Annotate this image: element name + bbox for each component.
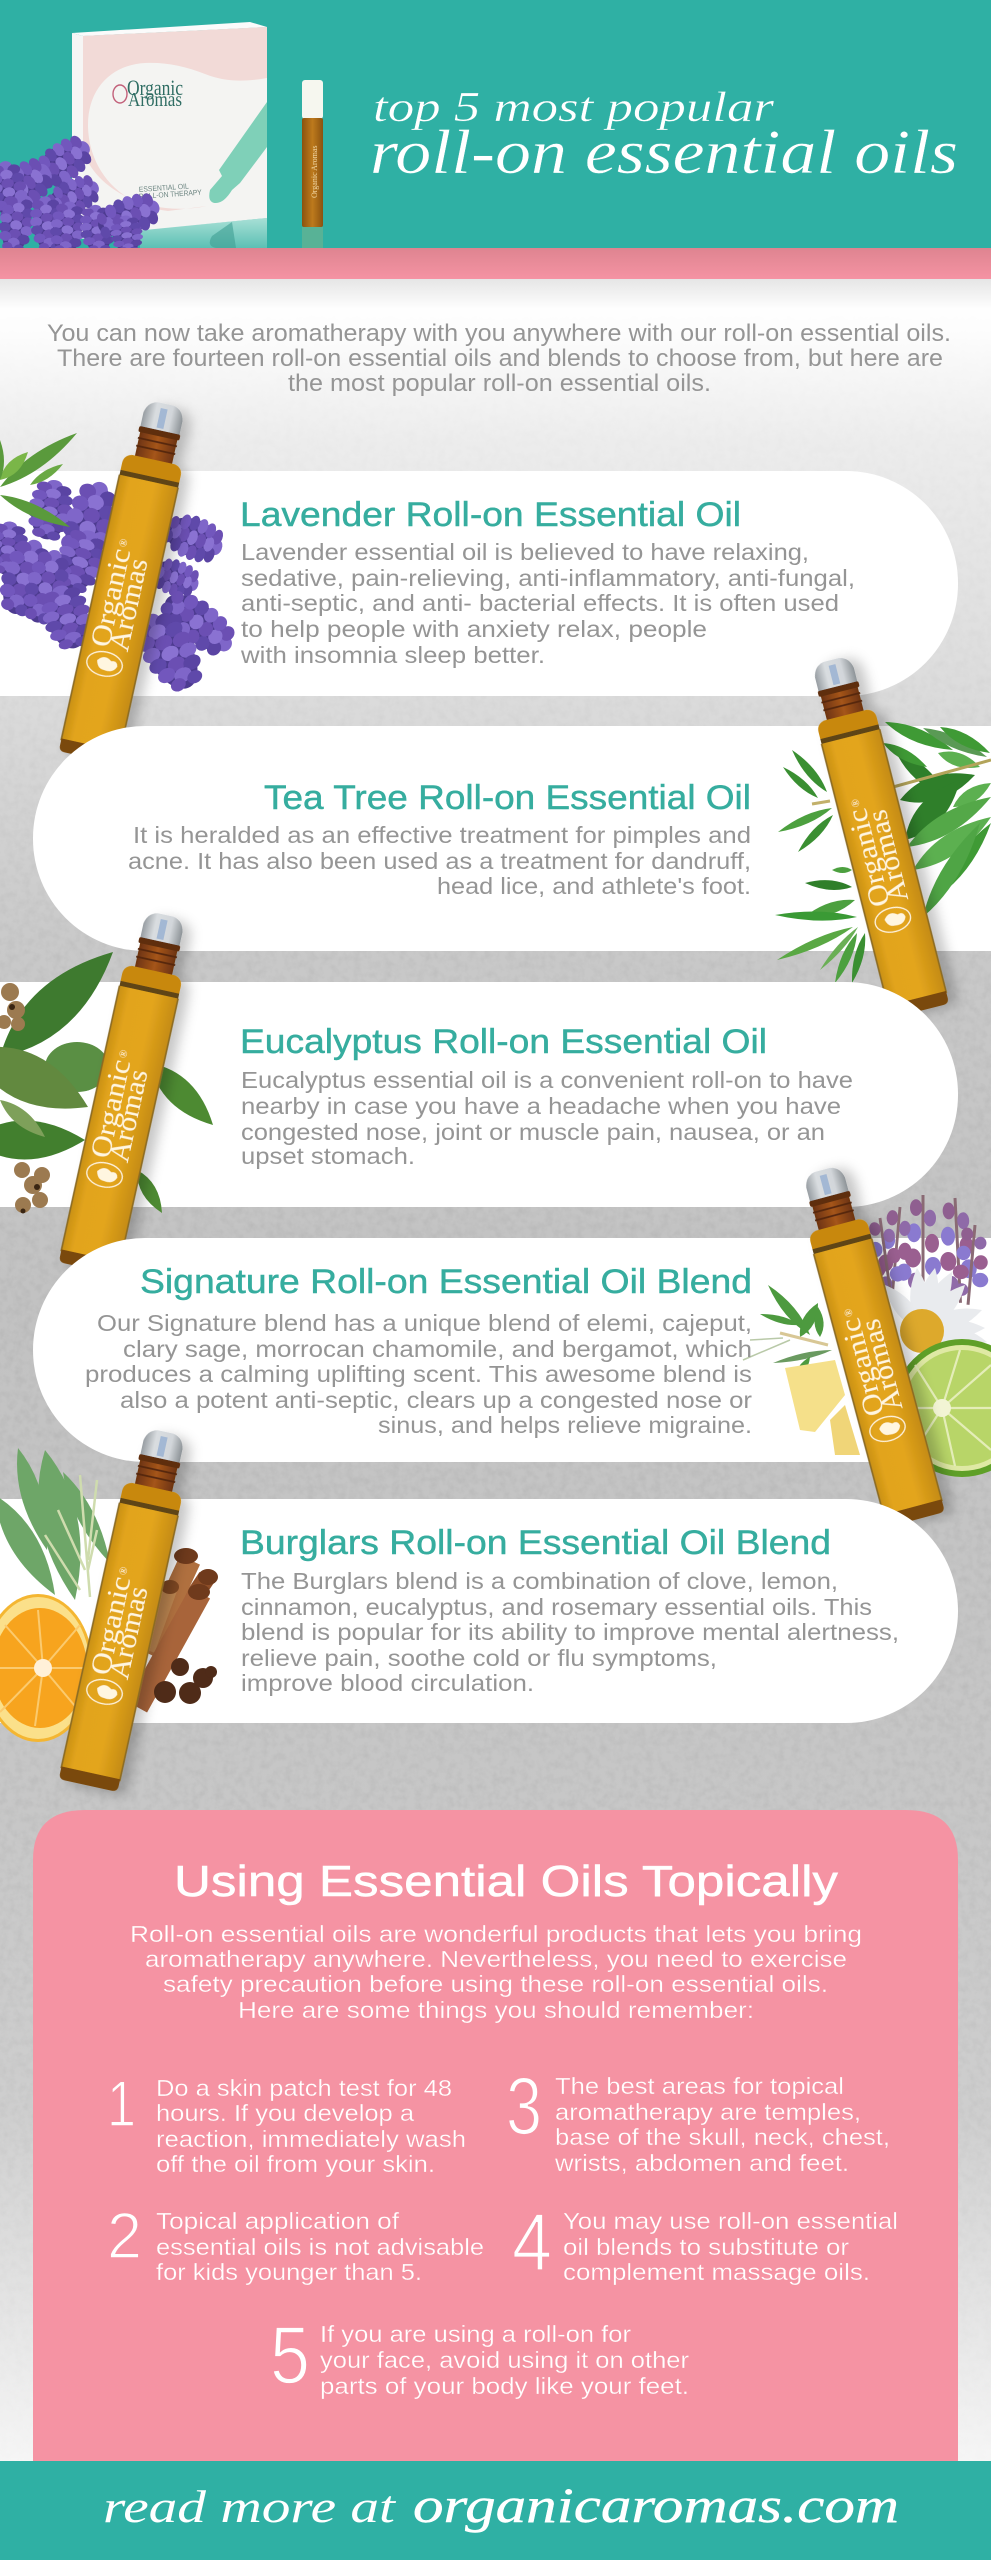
icon: product box: ROLL-ON THERAPY [139,188,202,201]
icon: roll-on bottle: Organic [834,1315,891,1420]
text block: introduction: safety precaution before using these roll-on essential oils. [163,1971,828,1997]
title [370,85,958,187]
icon: roll-on bottle: ® [117,1566,131,1576]
tip 1: off the oil from your skin. [156,2151,435,2177]
panel: signature blend [33,1162,991,1527]
text block [128,822,751,899]
icon: sage, chamomile, lemon and bergamot [743,1195,991,1477]
panel: burglars blend [0,1426,958,1792]
text block: Lavender essential oil is believed to have relaxing, [241,539,809,565]
icon: eucalyptus leaves and seeds [0,936,222,1216]
intro text: the most popular roll-on essential oils. [288,370,711,397]
footer banner: organicaromas.com [413,2477,899,2533]
tip 5 [270,2310,689,2401]
text block: introduction [130,1921,862,2023]
text block: The Burglars blend is a combination of clove, lemon, [241,1568,838,1594]
tip 2: Topical application of [156,2208,400,2234]
tea tree sprig [743,1282,833,1384]
text block: to help people with anxiety relax, people [241,616,707,642]
icon: roll-on bottle: Aromas [854,1316,909,1415]
heading: Lavender Roll-on Essential Oil [240,496,741,534]
tip 1: reaction, immediately wash [156,2126,466,2152]
icon: lavender flowers [0,475,244,700]
icon: product box: Organic [127,75,183,100]
icon: roll-on bottle: Organic [85,545,137,650]
text block: head lice, and athlete's foot. [437,873,751,899]
title: roll-on essential oils [370,119,958,187]
icon: roll-on bottle: Aromas [103,1066,155,1165]
tip 5: If you are using a roll-on for [320,2321,631,2347]
tip 1: 1 [107,2067,136,2140]
text block: introduction: Roll-on essential oils are wonderful products that lets you bring [130,1921,862,1947]
tip 3: aromatherapy are temples, [555,2099,861,2125]
icon: roll-on bottle: Aromas [103,555,155,654]
icon: tea tree leaves [775,716,991,985]
icon: lavender sprig [0,136,160,248]
text block: Our Signature blend has a unique blend of elemi, cajeput, [97,1310,752,1336]
header banner [0,0,991,279]
tip 1 [107,2067,466,2177]
text block: also a potent anti-septic, clears up a congested nose or [120,1387,752,1413]
tip 5: your face, avoid using it on other [320,2347,689,2373]
icon: eucalyptus blades and rosemary [0,1445,117,1604]
icon: roll-on bottle: Organic [841,805,897,910]
intro text: There are fourteen roll-on essential oils and blends to choose from, but here are [57,345,943,372]
bergamot slice [893,1339,991,1477]
footer banner [0,2461,991,2560]
tip 1: Do a skin patch test for 48 [156,2075,452,2101]
footer banner: read more at [103,2481,397,2532]
tip 4: 4 [512,2197,552,2288]
heading: Burglars Roll-on Essential Oil Blend [240,1524,831,1562]
tip 4 [512,2197,898,2288]
icon: roll-on bottle [802,653,949,1018]
icon: roll-on bottle [59,1426,195,1792]
icon: roll-on bottle: ® [117,1049,131,1059]
tip 4: oil blends to substitute or [563,2234,849,2260]
text block: introduction: Here are some things you should remember: [238,1997,754,2023]
text block: relieve pain, soothe cold or flu symptoms, [241,1645,717,1671]
icon: product box: Aromas [128,89,182,111]
text block [240,539,855,668]
icon: roll-on bottle: ® [842,1307,856,1318]
panel: lavender [0,398,958,764]
icon: roll-on bottle: Aromas [103,1583,155,1682]
text block: Eucalyptus essential oil is a convenient roll-on to have [241,1067,853,1093]
panel: tea tree [33,653,991,1018]
tip 2: for kids younger than 5. [156,2259,422,2285]
tip 3: 3 [506,2061,542,2152]
text block: introduction: aromatherapy anywhere. Nevertheless, you need to exercise [145,1946,847,1972]
text block: It is heralded as an effective treatment for pimples and [133,822,751,848]
icon: roll-on bottle [59,398,195,764]
icon: roll-on bottle: Organic [85,1573,137,1678]
tip 1: hours. If you develop a [156,2100,415,2126]
icon: small roll-on bottle: Organic Aromas [310,145,319,198]
icon: roll-on bottle: Organic [85,1056,137,1161]
sage flowers [863,1195,991,1306]
candied lemon [785,1360,860,1455]
text block: improve blood circulation. [241,1670,534,1696]
tip 2: essential oils is not advisable [156,2234,484,2260]
panel: eucalyptus [0,909,958,1275]
text block: congested nose, joint or muscle pain, nausea, or an [241,1119,825,1145]
text block: produces a calming uplifting scent. This awesome blend is [85,1361,752,1387]
heading: Tea Tree Roll-on Essential Oil [264,779,751,817]
tip 5: parts of your body like your feet. [320,2373,689,2399]
text block [85,1310,752,1438]
intro text: You can now take aromatherapy with you anywhere with our roll-on essential oils. [47,320,951,347]
tip 3: wrists, abdomen and feet. [554,2150,849,2176]
heading: Signature Roll-on Essential Oil Blend [140,1263,752,1301]
text block [241,1067,853,1169]
text block: nearby in case you have a headache when you have [241,1093,841,1119]
text block [241,1568,899,1696]
icon: orange slice [0,1594,93,1742]
text block: cinnamon, eucalyptus, and rosemary essential oils. This [241,1594,872,1620]
text block: anti-septic, and anti- bacterial effects. It is often used [241,590,839,616]
tip 4: complement massage oils. [563,2259,870,2285]
tip 3: The best areas for topical [555,2073,844,2099]
icon: roll-on bottle [59,909,195,1275]
icon: product box: ESSENTIAL OIL [139,182,189,194]
icon: small roll-on bottle [302,80,323,248]
title: top 5 most popular [373,85,775,131]
text block: with insomnia sleep better. [240,642,545,668]
tip 2 [107,2199,484,2285]
tip 4: You may use roll-on essential [563,2208,898,2234]
tip 2: 2 [107,2199,142,2272]
icon: product box [72,22,267,248]
icon: roll-on bottle: Aromas [861,807,915,906]
icon: rosemary sprig [0,427,81,532]
text block: sedative, pain-relieving, anti-inflammatory, anti-fungal, [241,565,855,591]
icon: roll-on bottle [793,1162,945,1527]
heading: Using Essential Oils Topically [174,1857,838,1906]
tip 5: 5 [270,2310,310,2401]
chamomile flower [878,1266,989,1353]
text block: blend is popular for its ability to improve mental alertness, [241,1619,899,1645]
heading: Eucalyptus Roll-on Essential Oil [240,1023,767,1061]
intro text [47,320,951,397]
text block: sinus, and helps relieve migraine. [378,1412,752,1438]
tip 3 [506,2061,890,2176]
tip 3: base of the skull, neck, chest, [555,2124,890,2150]
icon: cinnamon sticks and cloves [137,1548,218,1707]
text block: acne. It has also been used as a treatment for dandruff, [128,848,751,874]
text block: clary sage, morrocan chamomile, and bergamot, which [123,1336,752,1362]
icon: roll-on bottle: ® [117,538,131,548]
panel: using essential oils topically [33,1810,958,2461]
text block: upset stomach. [241,1143,415,1169]
icon: roll-on bottle: ® [849,798,863,809]
